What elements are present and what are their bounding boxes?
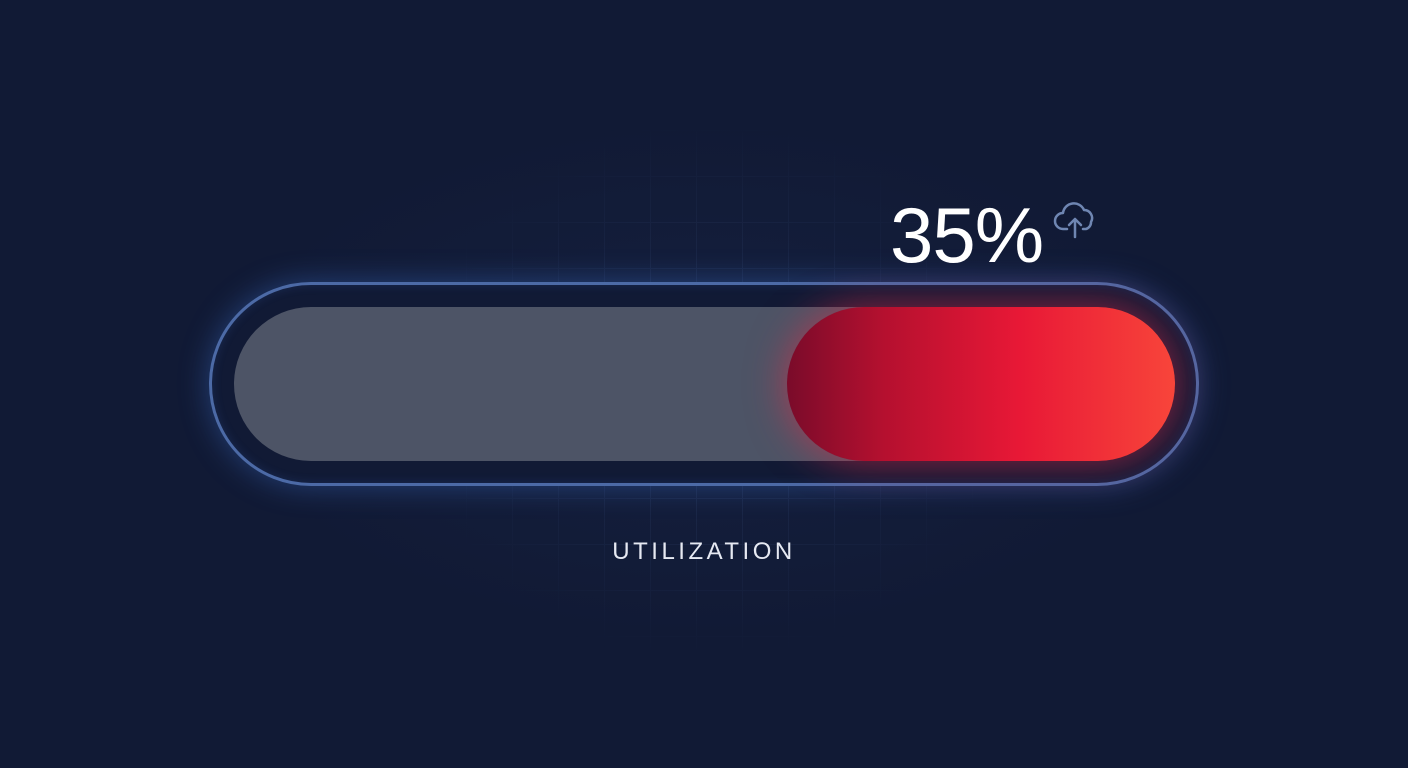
gray empty track xyxy=(234,307,1034,461)
icon: cloud upload xyxy=(1054,202,1094,238)
outer track xyxy=(209,282,1199,486)
axis label: UTILIZATION xyxy=(612,538,796,565)
percentage label: 35% xyxy=(890,191,1043,279)
red fill 35% xyxy=(787,307,1175,461)
progress bar xyxy=(194,266,1213,502)
